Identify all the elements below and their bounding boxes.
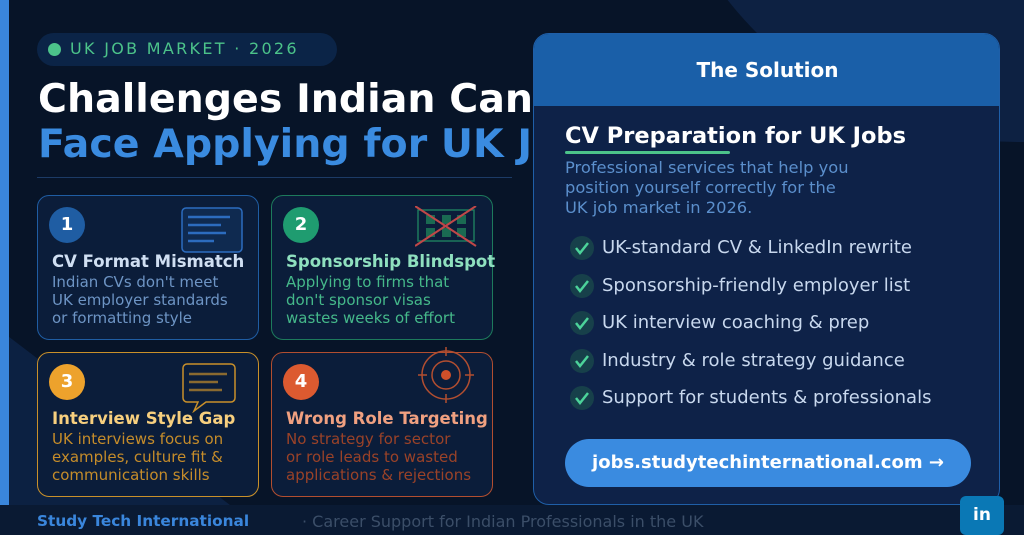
solution header: The Solution bbox=[696, 58, 839, 82]
checklist bbox=[570, 236, 931, 410]
card 2: don't sponsor visas bbox=[286, 291, 431, 309]
card 4: No strategy for sector bbox=[286, 430, 450, 448]
description bbox=[565, 158, 849, 217]
card 4: Wrong Role Targeting bbox=[286, 409, 488, 428]
footer: · Career Support for Indian Professionals in the UK bbox=[302, 512, 703, 531]
card 1 bbox=[37, 195, 259, 340]
checklist: UK-standard CV & LinkedIn rewrite bbox=[602, 237, 912, 258]
checklist: Support for students & professionals bbox=[602, 387, 931, 408]
title: Face Applying for UK Jobs bbox=[38, 121, 611, 167]
card 1: or formatting style bbox=[52, 309, 192, 327]
badge bbox=[37, 33, 337, 66]
card 1: Indian CVs don't meet bbox=[52, 273, 218, 291]
card 2: wastes weeks of effort bbox=[286, 309, 455, 327]
checklist: Industry & role strategy guidance bbox=[602, 350, 905, 371]
card 2 bbox=[271, 195, 493, 340]
panel: solution bbox=[533, 33, 1000, 505]
title bbox=[38, 76, 699, 167]
card 3: 3 bbox=[61, 371, 73, 392]
icon: target bbox=[418, 347, 474, 403]
description: UK job market in 2026. bbox=[565, 198, 752, 217]
card 3: communication skills bbox=[52, 466, 210, 484]
checklist: Sponsorship-friendly employer list bbox=[602, 275, 910, 296]
badge: UK JOB MARKET · 2026 bbox=[70, 39, 299, 58]
left accent bar bbox=[0, 0, 9, 505]
button: jobs.studytechinternational.com → bbox=[592, 452, 944, 473]
card 4: or role leads to wasted bbox=[286, 448, 458, 466]
card 1: CV Format Mismatch bbox=[52, 252, 244, 271]
title: Challenges Indian Candidates bbox=[38, 76, 699, 122]
description: Professional services that help you bbox=[565, 158, 849, 177]
card 1: 1 bbox=[61, 214, 73, 235]
card 3 bbox=[37, 352, 259, 497]
card 3: UK interviews focus on bbox=[52, 430, 223, 448]
card 2: 2 bbox=[295, 214, 307, 235]
footer: Study Tech International bbox=[37, 512, 249, 530]
solution header bbox=[534, 34, 1001, 106]
card 3: examples, culture fit & bbox=[52, 448, 223, 466]
card 4 bbox=[271, 352, 493, 497]
icon: crossed building bbox=[415, 206, 476, 247]
heading: CV Preparation for UK Jobs bbox=[565, 123, 906, 149]
card 3: Interview Style Gap bbox=[52, 409, 235, 428]
card 4: applications & rejections bbox=[286, 466, 471, 484]
icon: document bbox=[181, 207, 243, 253]
card 4: 4 bbox=[295, 371, 307, 392]
icon: linkedin: in bbox=[973, 505, 991, 525]
button bbox=[565, 439, 971, 487]
card 2: Applying to firms that bbox=[286, 273, 449, 291]
icon: linkedin bbox=[960, 496, 1004, 535]
icon: speech bubble bbox=[182, 363, 236, 413]
checklist: UK interview coaching & prep bbox=[602, 312, 869, 333]
description: position yourself correctly for the bbox=[565, 178, 836, 197]
footer bbox=[0, 505, 1024, 535]
card 2: Sponsorship Blindspot bbox=[286, 252, 495, 271]
card 1: UK employer standards bbox=[52, 291, 228, 309]
